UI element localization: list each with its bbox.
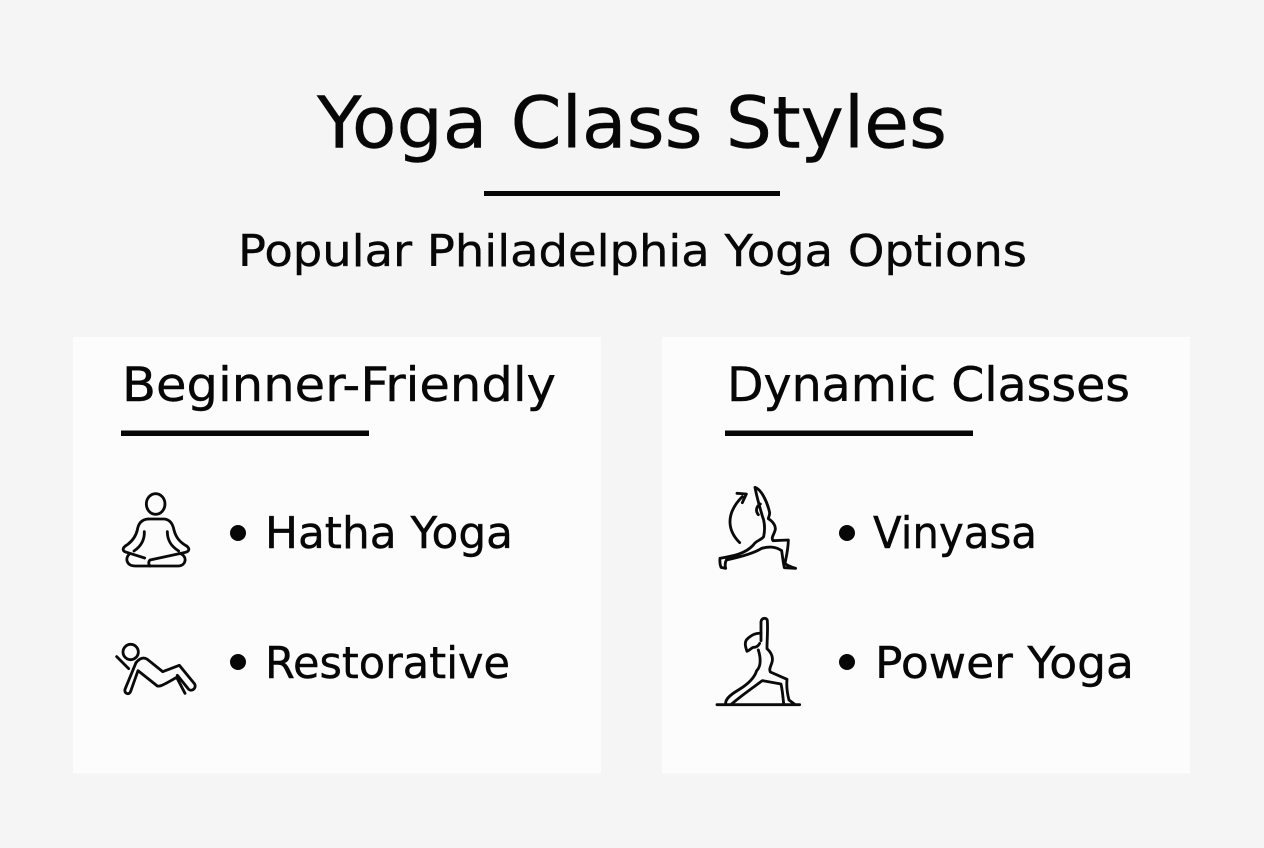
bullet and label: hatha yoga: Hatha Yoga: [265, 508, 513, 559]
subtitle: Popular Philadelphia Yoga Options: [238, 226, 1027, 277]
bullet and label: restorative: Restorative: [265, 638, 510, 689]
heading: dynamic classes: Dynamic Classes: [727, 358, 1130, 413]
bullet and label: vinyasa: Vinyasa: [873, 508, 1037, 559]
icon: reclined restorative pose: [117, 644, 195, 694]
heading: beginner-friendly: Beginner-Friendly: [122, 358, 556, 413]
bullet and label: power yoga: Power Yoga: [875, 638, 1134, 689]
panel: dynamic classes: [662, 337, 1190, 774]
panel: beginner-friendly: [73, 337, 601, 774]
icon: seated meditation: [123, 494, 189, 566]
title: Yoga Class Styles: [316, 82, 947, 164]
icon: warrior pose on ground: [717, 618, 800, 705]
icon: lunge with arrow: [720, 487, 796, 568]
